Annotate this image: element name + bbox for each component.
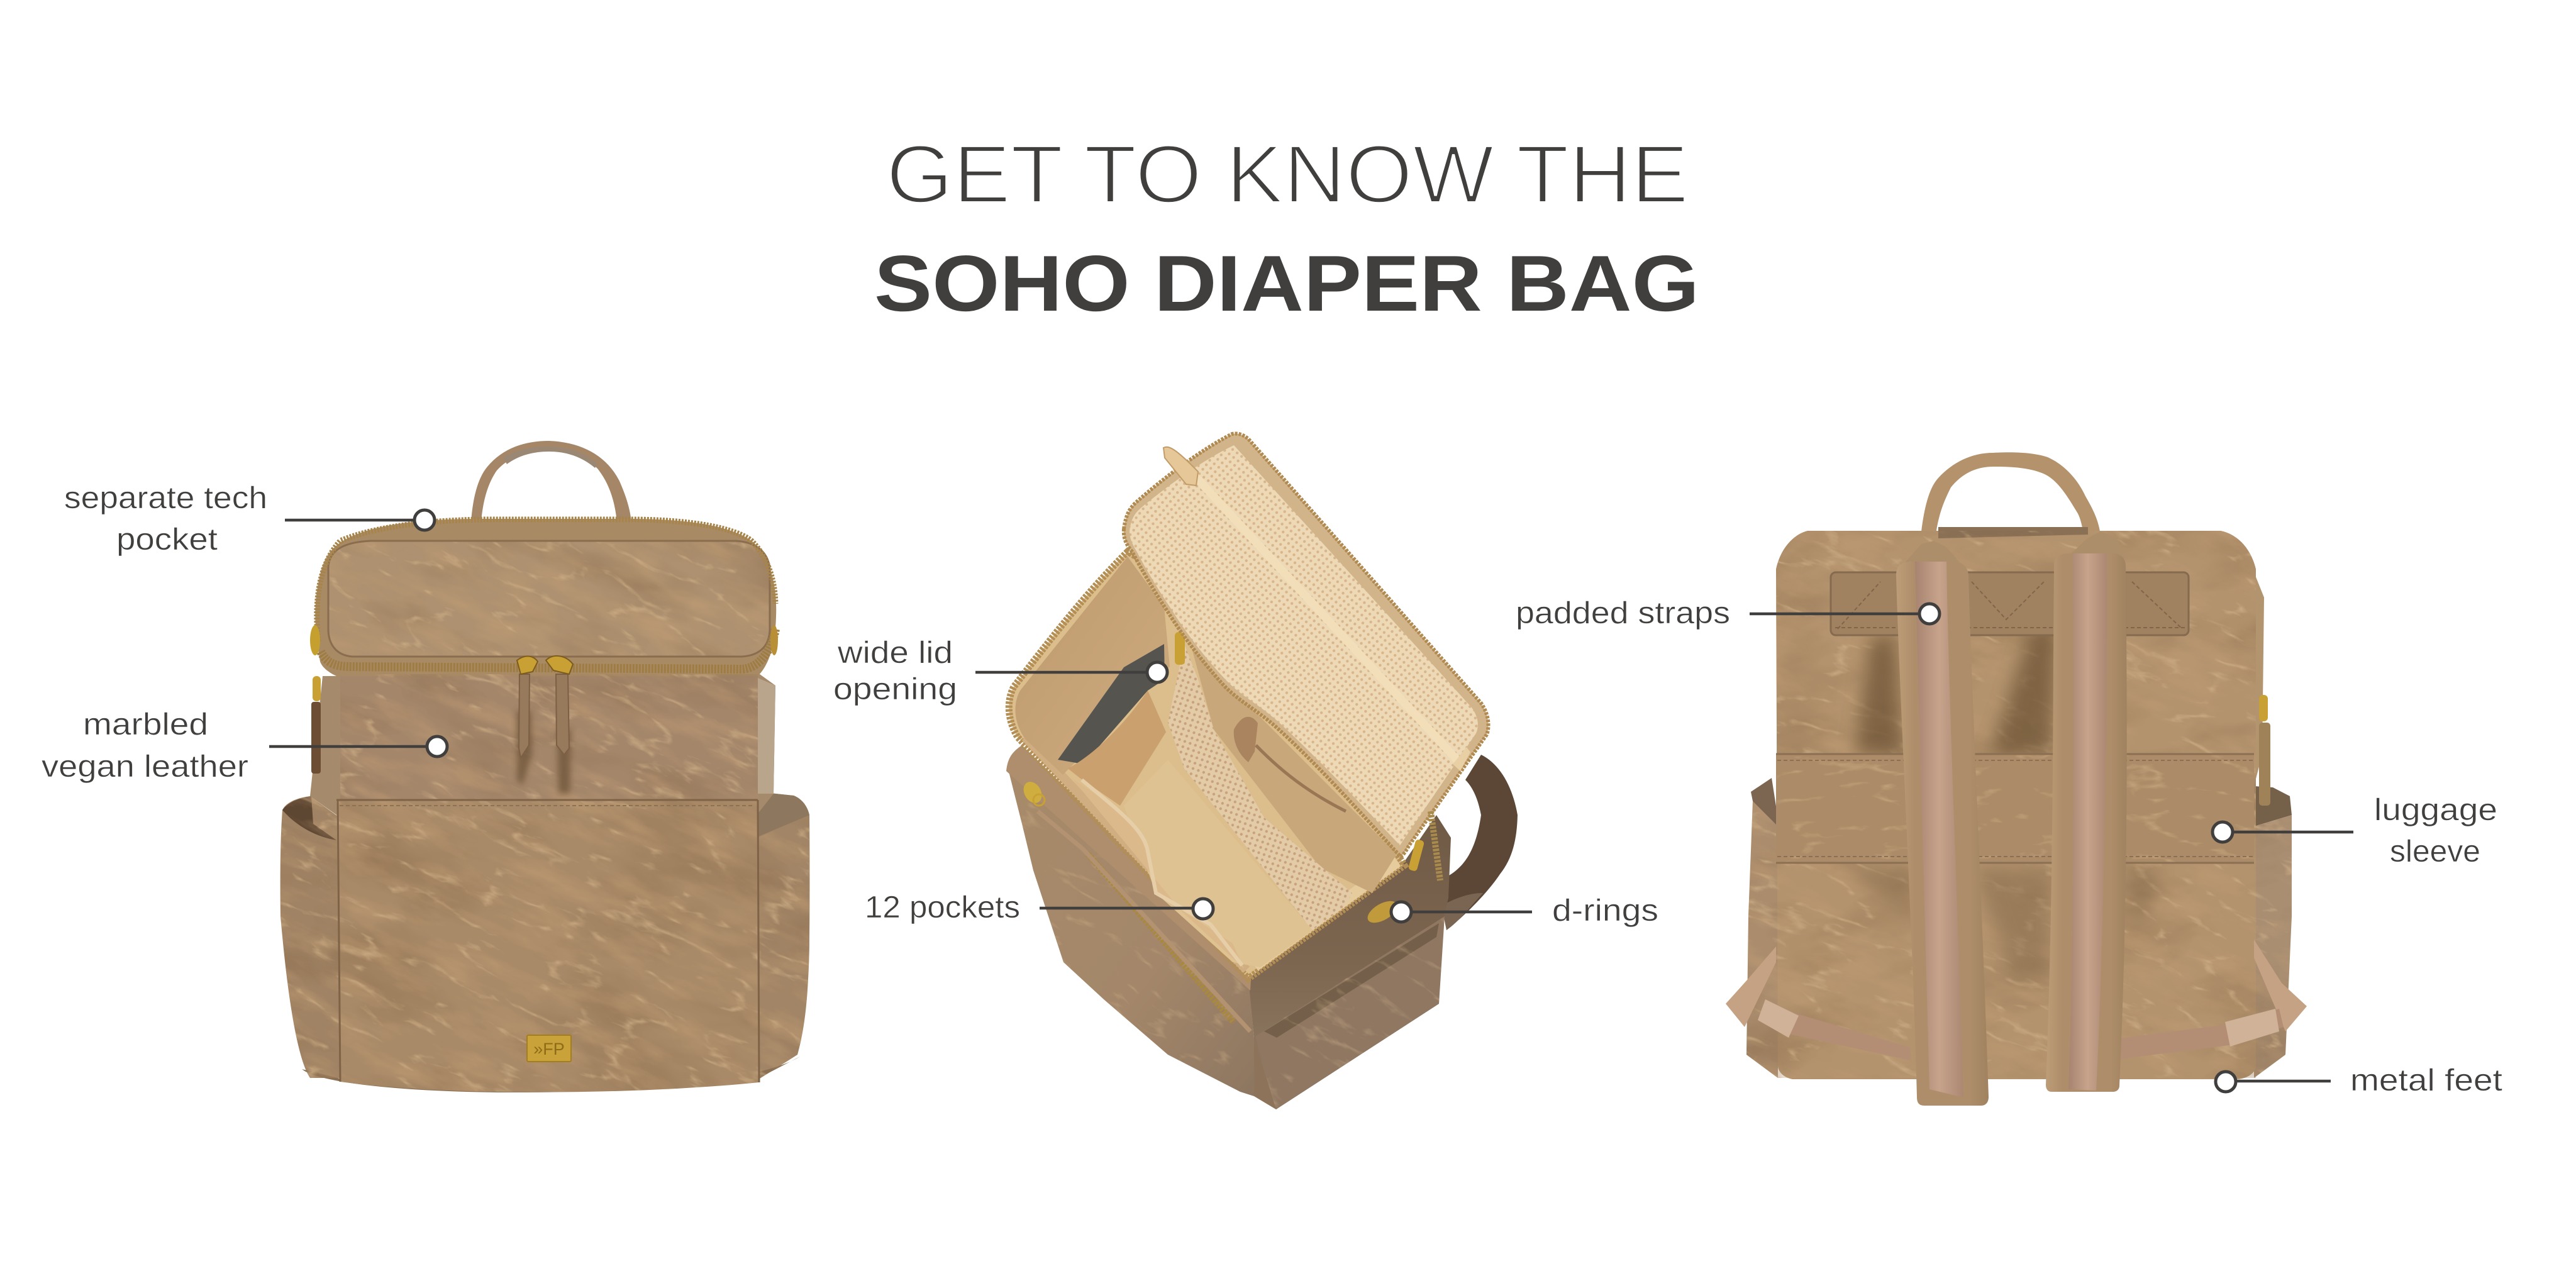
right side pocket opening (2254, 786, 2292, 826)
left side pocket opening (1751, 778, 1780, 830)
strap anchor: right (2066, 531, 2126, 558)
zipper pull shadows (517, 711, 571, 794)
face pocket piping (1038, 811, 1250, 1031)
leather texture (1022, 804, 1444, 1107)
side pocket: left (280, 796, 340, 1078)
back panel (1776, 531, 2256, 1079)
rim inner band: left (1025, 737, 1246, 970)
callout: luggage sleeve: sleeve (2390, 835, 2480, 869)
front zipper on face (1088, 854, 1234, 1023)
opening behind handle (1938, 527, 2088, 538)
leather loop (1234, 717, 1258, 762)
callout: d-rings: d-rings (1552, 894, 1658, 928)
heading: line 2: SOHO DIAPER BAG (874, 239, 1699, 328)
callout: luggage sleeve (2212, 793, 2497, 869)
right zipper pull (2259, 695, 2270, 806)
exterior: right pocket (1255, 916, 1445, 1109)
interior left wall (1015, 557, 1170, 775)
callout: d-rings (1391, 894, 1658, 928)
callout: padded straps: padded straps (1516, 596, 1730, 630)
pocket zipper slider (1020, 779, 1045, 806)
luggage sleeve (1776, 753, 2254, 863)
right shoulder strap (2046, 553, 2127, 1092)
marbling texture (280, 542, 810, 1092)
lower strap: right (2119, 940, 2307, 1059)
right side pocket (2254, 815, 2292, 1078)
callout: marbled vegan leather: vegan leather (42, 750, 248, 784)
patch stitching (1835, 582, 2185, 629)
pocket inner sliver (1264, 923, 1439, 1038)
marbling texture (1746, 531, 2292, 1078)
callout: 12 pockets (865, 891, 1213, 924)
left D-ring (310, 625, 320, 655)
strap anchor: left (1899, 541, 1965, 569)
front pocket (336, 799, 759, 1092)
title (874, 128, 1699, 328)
sleeve stitching (1776, 754, 2254, 863)
exterior: right face (1248, 815, 1451, 1109)
callout: wide lid opening (833, 636, 1167, 706)
lid mesh fabric (1130, 445, 1478, 845)
front inner pocket (1072, 778, 1244, 969)
callout: separate tech pocket (64, 481, 435, 557)
right zipper edge (2251, 566, 2264, 786)
lid zipper surround (315, 519, 776, 676)
callout: separate tech pocket: pocket (116, 523, 218, 557)
rim inner band: right (1255, 862, 1397, 966)
inner gold hardware (1175, 632, 1185, 665)
exterior: left pocket tip (1254, 1031, 1276, 1109)
callout: luggage sleeve: luggage (2374, 793, 2497, 827)
callout: marbled vegan leather: marbled (83, 708, 208, 741)
satin pocket (1068, 691, 1166, 806)
left zipper pull (313, 676, 321, 701)
shoulder strap (1440, 755, 1518, 930)
lid zipper rim (1124, 433, 1489, 857)
left side pocket (1746, 801, 1778, 1078)
callout: wide lid opening: wide lid (837, 636, 953, 670)
infographic canvas (42, 146, 2502, 1109)
bag: open interior view (1005, 431, 1518, 1109)
drawstring (1256, 745, 1346, 811)
front zipper (321, 629, 775, 669)
callout: metal feet (2216, 1063, 2502, 1097)
left shoulder strap (1896, 562, 1989, 1106)
heading: line 1: GET TO KNOW THE (886, 128, 1689, 220)
mesh lid (1124, 433, 1489, 857)
pocket stitching (340, 805, 755, 806)
bag: front view (280, 441, 810, 1092)
callout: metal feet: metal feet (2350, 1063, 2502, 1097)
callout: separate tech pocket: separate tech (64, 481, 267, 515)
handle underside (503, 447, 597, 468)
lower strap: left (1726, 947, 1911, 1060)
top handle (1921, 452, 2101, 535)
grey insulated pocket (1058, 644, 1165, 764)
side pocket: right (758, 792, 809, 1080)
gold zipper sliders (517, 656, 573, 674)
side pocket opening: left (282, 796, 336, 840)
side pocket opening: right (755, 792, 809, 838)
mesh pocket (1168, 644, 1352, 930)
callout: padded straps (1516, 596, 1940, 630)
callout: marbled vegan leather (42, 708, 447, 784)
exterior: left face (1008, 769, 1254, 1096)
front pocket piping (1082, 780, 1242, 965)
gold logo plate (527, 1035, 571, 1062)
gold logo plate: »FP (533, 1040, 565, 1058)
base (302, 1057, 800, 1092)
lower strap sheen (1441, 893, 1483, 930)
body side panels (310, 674, 775, 818)
sleeve lower stitch (1777, 760, 2253, 857)
rim strip on top of the left face (1006, 745, 1252, 991)
handle (471, 441, 631, 522)
back patch (1831, 572, 2189, 635)
lid edge (328, 541, 770, 657)
zipper pull tabs (519, 674, 569, 758)
side zipper (1431, 811, 1440, 880)
lid zipper pull (1163, 447, 1198, 486)
sleeve texture (1776, 753, 2254, 863)
callout: 12 pockets: 12 pockets (865, 891, 1020, 924)
right sheen (758, 678, 775, 794)
left pull tab (311, 702, 321, 774)
lid zipper center (1194, 475, 1461, 764)
front pocket edge (336, 800, 759, 1082)
interior floor and rim (1009, 552, 1404, 979)
lid panel (328, 541, 770, 657)
sand panel (1192, 648, 1397, 893)
right D-ring (770, 625, 778, 655)
strap shadows (1855, 629, 2057, 755)
lid zipper stop (1453, 747, 1470, 771)
bag: back view (1726, 452, 2307, 1106)
gold corner slider (1408, 839, 1424, 872)
D-ring (1364, 897, 1401, 927)
middle panel (340, 674, 758, 801)
top zipper (317, 519, 775, 641)
floor (1124, 760, 1313, 967)
lower shadows (1843, 868, 2163, 981)
callout: wide lid opening: opening (833, 672, 957, 706)
